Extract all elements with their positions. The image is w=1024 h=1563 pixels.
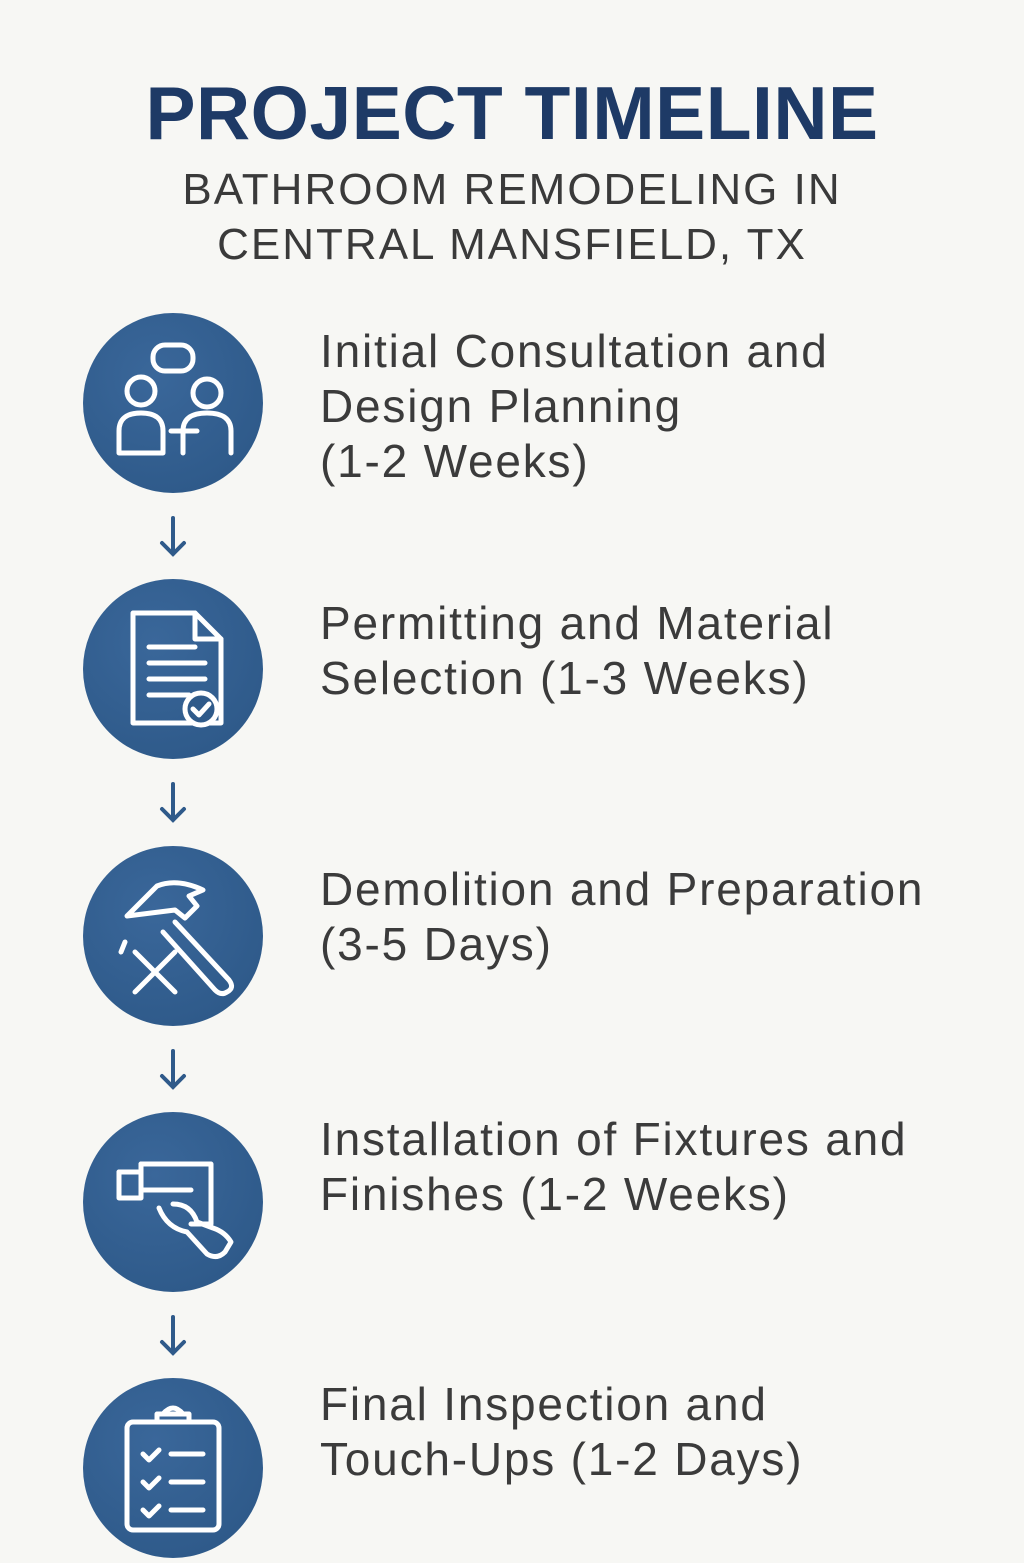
icon: document [83,579,263,759]
step 4 text [320,1113,907,1220]
step 5 text: Touch-Ups (1-2 Days) [320,1433,803,1485]
subtitle: CENTRAL MANSFIELD, TX [217,220,807,269]
step 1 text [320,325,829,487]
subtitle [182,165,842,269]
step 5 text [320,1378,803,1485]
step 3 text [320,863,924,970]
step 1 text: Initial Consultation and [320,325,829,377]
icon: consultation [83,313,263,493]
step 3 text: (3-5 Days) [320,918,553,970]
arrow [160,516,186,557]
step 2 text: Selection (1-3 Weeks) [320,652,809,704]
subtitle: BATHROOM REMODELING IN [182,165,842,214]
arrow [160,1049,186,1090]
icon: checklist [83,1378,263,1558]
arrow [160,1315,186,1356]
step 1 text: (1-2 Weeks) [320,435,589,487]
icon: fixtures [83,1112,263,1292]
title: PROJECT TIMELINE [145,71,879,155]
step 1 text: Design Planning [320,380,682,432]
step 2 text: Permitting and Material [320,597,834,649]
step 3 text: Demolition and Preparation [320,863,924,915]
step 5 text: Final Inspection and [320,1378,768,1430]
arrow [160,782,186,823]
step 4 text: Finishes (1-2 Weeks) [320,1168,790,1220]
step 4 text: Installation of Fixtures and [320,1113,907,1165]
step 2 text [320,597,834,704]
icon: hammer [83,846,263,1026]
